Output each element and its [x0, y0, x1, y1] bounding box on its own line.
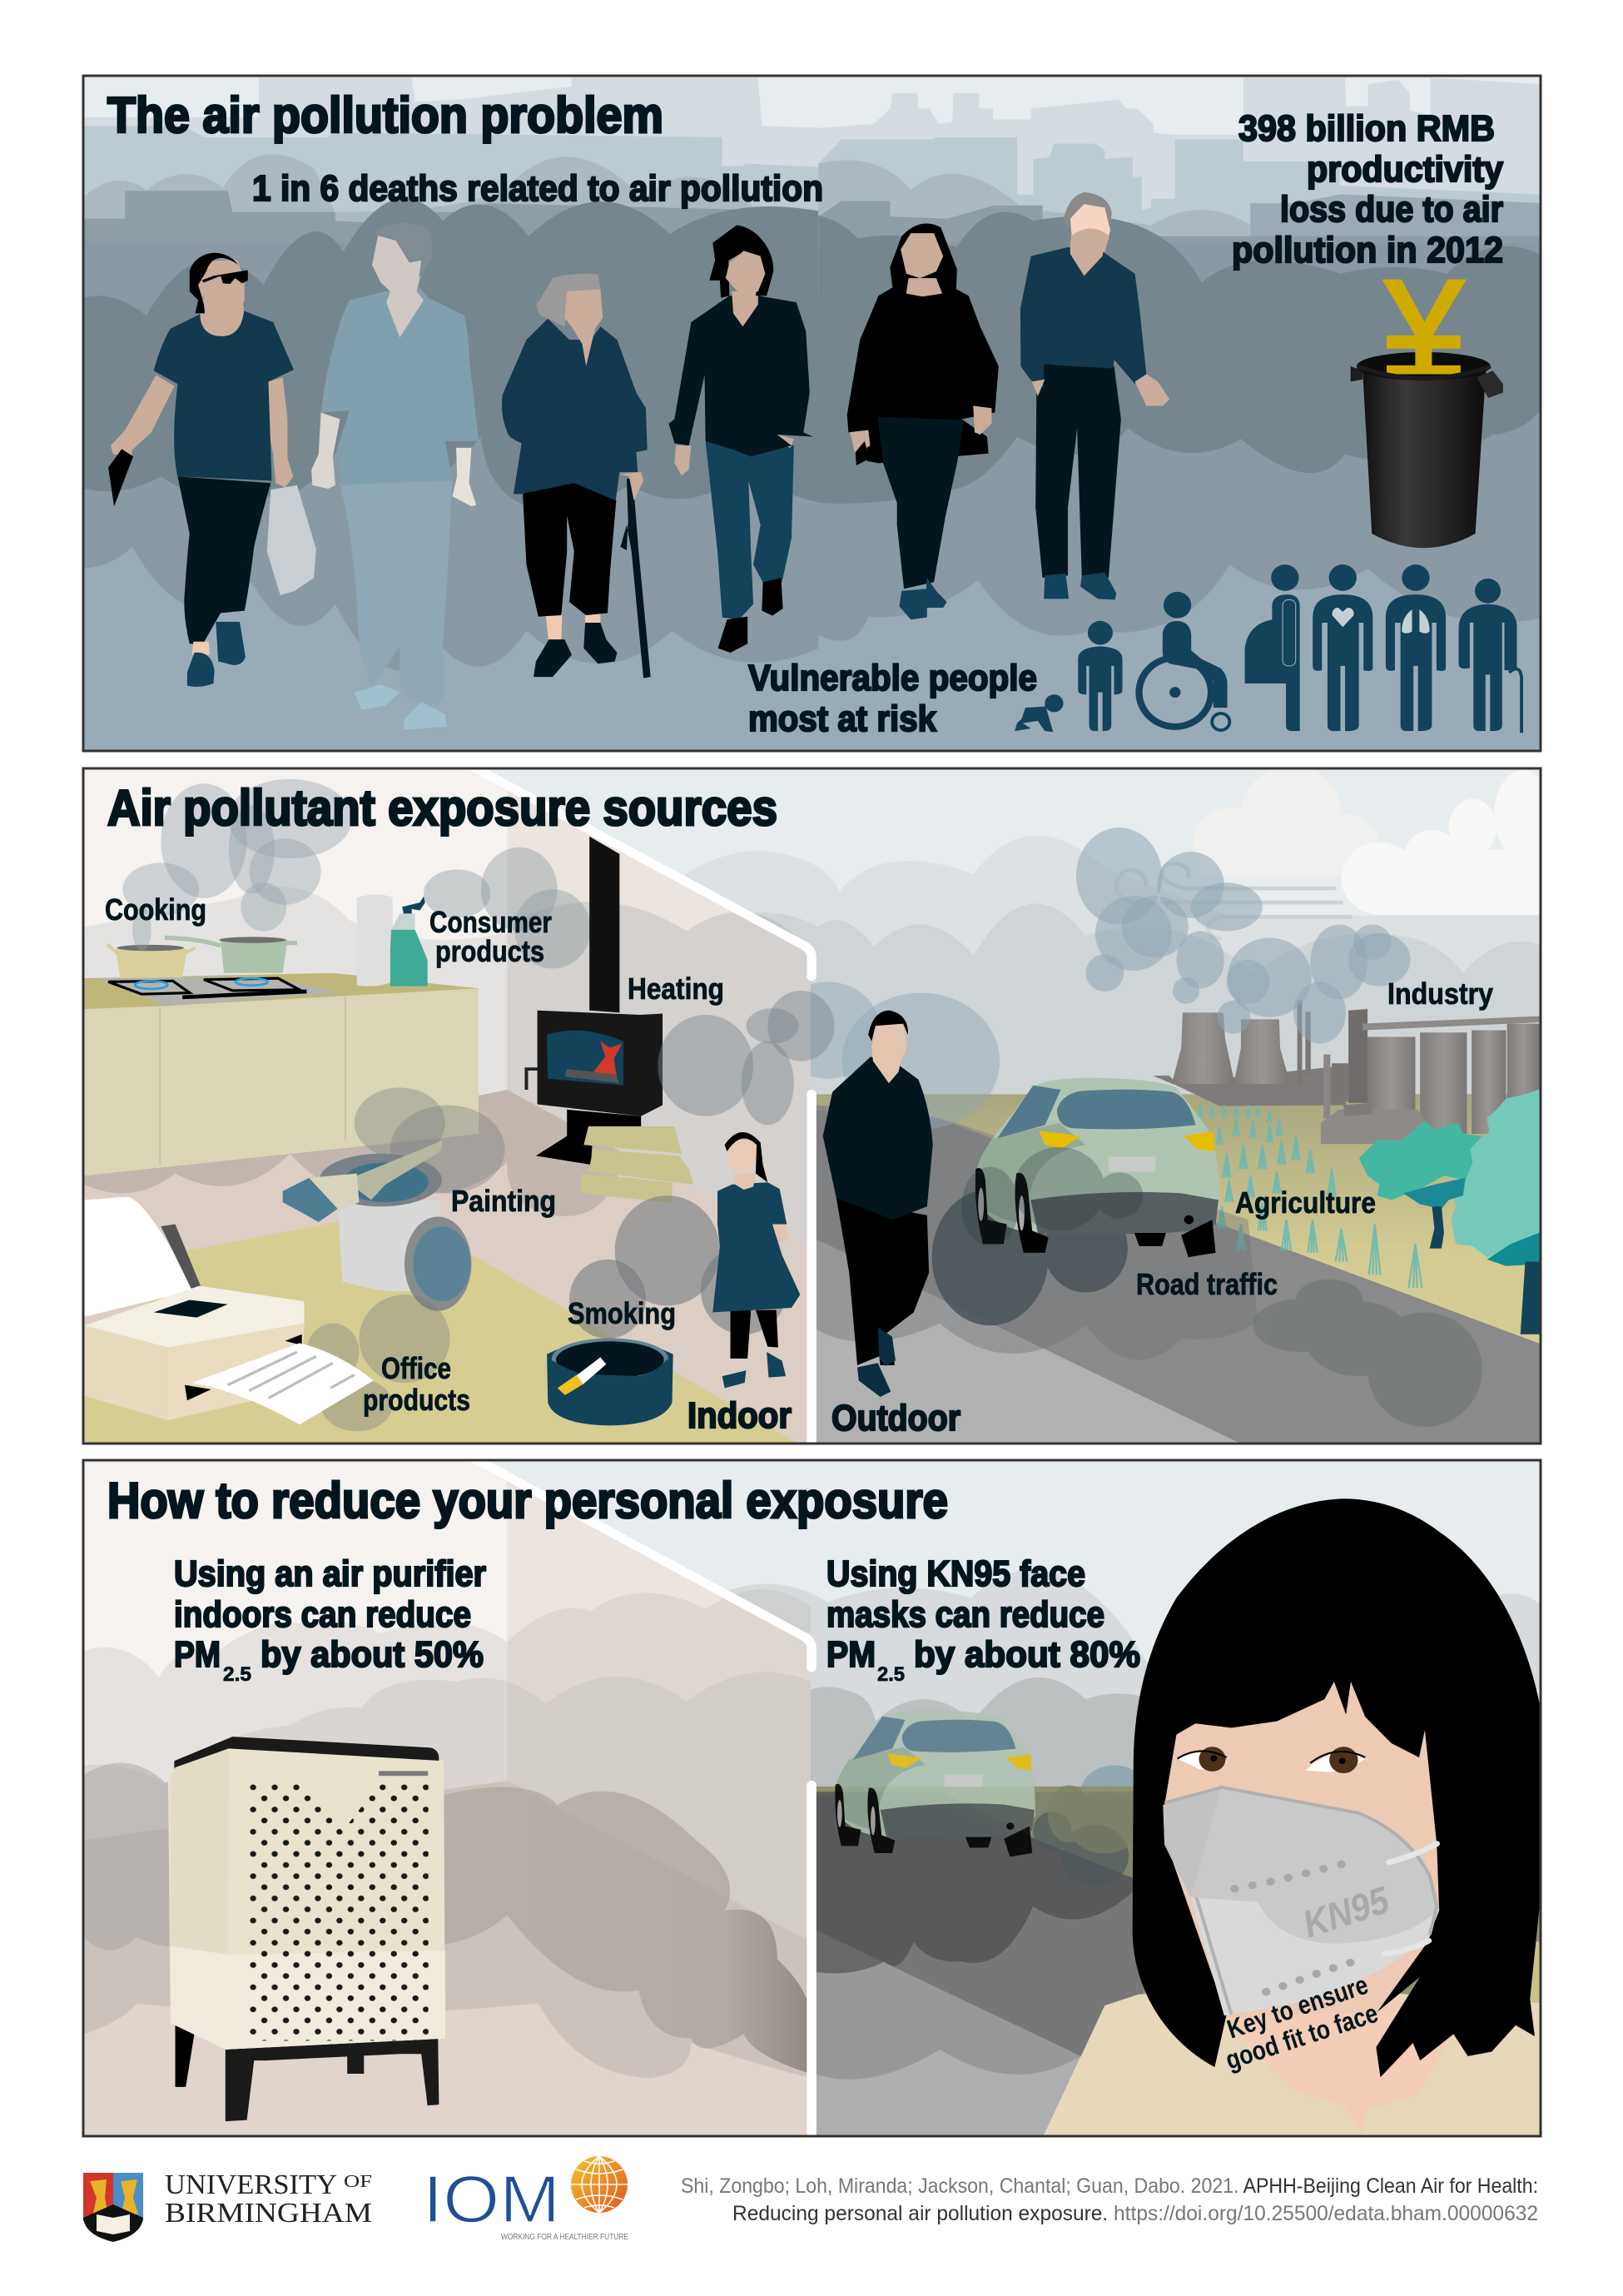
mask [1163, 1785, 1439, 2015]
person: girl [712, 1132, 800, 1388]
logo: IOM: WORKING FOR A HEALTHIER FUTURE [501, 2233, 628, 2242]
car [975, 1078, 1219, 1257]
icon: rubbish bin with yen symbol [1351, 280, 1503, 548]
logo: University of Birmingham [83, 2169, 372, 2242]
upper indoor smoke [84, 1589, 811, 2078]
smoke near products [424, 847, 591, 968]
person: neck [1219, 1985, 1453, 2134]
pavement [794, 1920, 1081, 2138]
people walking, right group [847, 192, 1521, 733]
right side sand [1530, 1941, 1544, 2030]
icon: person with lung condition [1386, 564, 1446, 731]
pale outdoor smoke [656, 1570, 1162, 1792]
cooking smoke [122, 779, 352, 951]
citation: Shi, Zongbo; Loh, Miranda; Jackson, Chantal; Guan, Dabo. 2021. APHH-Beijing Clean Air for Health: [681, 2174, 1538, 2198]
label: office products [363, 1351, 470, 1417]
darker outdoor smoke [754, 904, 1540, 1094]
statistic: productivity loss: productivity [1307, 149, 1503, 190]
text block: KN95 masks [826, 1553, 1140, 1686]
label: vulnerable people: Vulnerable people [748, 658, 1037, 698]
statistic: 1 in 6 deaths: 1 in 6 deaths related to air pollution [252, 168, 823, 209]
car in fog [835, 1710, 1035, 1856]
people walking, left group [108, 223, 813, 730]
icon: pregnant woman [1245, 564, 1300, 731]
dark lower smoke band [84, 1755, 811, 2074]
label: office products: products [363, 1383, 470, 1417]
label: heating: Heating [628, 972, 724, 1006]
icon: wheelchair user [1139, 592, 1229, 730]
paint tin and brush [283, 1141, 471, 1311]
blue haze [1081, 1766, 1148, 1818]
olive ground [794, 1787, 1544, 2007]
statistic: productivity loss: loss due to air [1280, 189, 1503, 230]
outdoor scene with mask wearer [656, 1498, 1559, 2138]
smoke on floor [84, 1090, 624, 1216]
text block: KN95 masks: masks can reduce [826, 1594, 1104, 1635]
printer [84, 1197, 374, 1424]
pavement [794, 1229, 1241, 1447]
citation [681, 2174, 1538, 2225]
label: agriculture: Agriculture [1235, 1185, 1376, 1220]
text block: air purifier: Using an air purifier [174, 1553, 486, 1594]
person: elderly woman with cane [502, 274, 651, 678]
icon: baby [1015, 694, 1064, 732]
factory [1153, 1001, 1540, 1144]
cooking pots [107, 937, 297, 978]
printer smoke [306, 1295, 450, 1431]
pale outdoor smoke [684, 836, 1540, 972]
floor smoke near smoking [569, 1195, 787, 1339]
label: office products: Office [381, 1351, 451, 1385]
logo: IOM: IOM [423, 2162, 560, 2236]
person: eyes [1178, 1747, 1365, 1773]
label: painting: Painting [451, 1184, 556, 1218]
logo: University of Birmingham: OF [344, 2171, 372, 2191]
text block: KN95 masks: 2.5 [877, 1663, 905, 1686]
middle indoor smoke [84, 1672, 811, 2078]
indoor scene [84, 766, 835, 1449]
air purifier [168, 1737, 445, 2121]
gas hob [99, 977, 340, 1006]
text block: air purifier [174, 1553, 486, 1686]
icon: person with heart condition [1313, 564, 1372, 731]
road [794, 1794, 1143, 2138]
label: cooking: Cooking [105, 892, 206, 927]
mask label: KN95: KN95 [1298, 1877, 1395, 1946]
label: consumer products: products [435, 934, 544, 968]
text block: KN95 masks: PM [826, 1634, 876, 1675]
logo: University of Birmingham: UNIVERSITY [165, 2169, 337, 2200]
person: man with blue shirt [1020, 192, 1169, 599]
dark smoke patch [1033, 1811, 1129, 1886]
text block: KN95 masks: by about 80% [914, 1634, 1140, 1675]
person: ghosted man in faded smoke [311, 223, 479, 730]
person: man outdoors [823, 1011, 933, 1397]
heater smoke [658, 991, 835, 1125]
text block: air purifier: by about 50% [261, 1634, 484, 1675]
darker outdoor smoke [656, 1677, 1162, 1792]
smoke behind man [775, 982, 1000, 1130]
ashtray with cigarette [547, 1339, 673, 1425]
city skyline and smoke background, right half [818, 77, 1544, 758]
label: smoking: Smoking [568, 1296, 676, 1330]
label: outdoor: Outdoor [831, 1398, 960, 1439]
city skyline and smoke background, left half [70, 77, 844, 758]
left wall haze [84, 887, 507, 1175]
outdoor scene [656, 766, 1551, 1447]
statistic: productivity loss: pollution in 2012 [1232, 230, 1503, 271]
mid grey smoke [794, 1792, 1143, 2080]
kitchen counter [84, 973, 479, 1175]
heading: the air pollution problem: The air pollution problem [107, 87, 663, 143]
text block: air purifier: PM [174, 1634, 221, 1675]
logo: IOM [423, 2156, 628, 2242]
heading: air pollutant exposure sources: Air pollutant exposure sources [107, 780, 777, 836]
roof and wall edge [471, 766, 812, 1449]
text block: air purifier: indoors can reduce [174, 1594, 471, 1635]
wood burner [526, 837, 663, 1165]
label: consumer products: Consumer [429, 905, 552, 939]
callout: key to ensure good fit: Key to ensure [1223, 1970, 1372, 2045]
panel: how to reduce your personal exposure [83, 1457, 1559, 2139]
text block: KN95 masks: Using KN95 face [826, 1553, 1085, 1594]
person: body [1043, 1985, 1544, 2138]
roof and wall edge [471, 1457, 812, 2139]
dark grey smoke [794, 1792, 1143, 1973]
road [794, 1103, 1544, 1447]
logo: University of Birmingham: BIRMINGHAM [165, 2198, 372, 2229]
dark smoke on road [932, 1189, 1128, 1325]
icon: elderly person with cane [1459, 579, 1521, 733]
label: vulnerable people [747, 663, 1037, 733]
heading: how to reduce your personal exposure: How to reduce your personal exposure [107, 1473, 948, 1528]
ground [794, 1094, 1544, 1447]
callout: key to ensure good fit: good fit to face [1222, 1998, 1382, 2075]
trees [1359, 1087, 1544, 1334]
haze on road [794, 1110, 1258, 1360]
panel: air pollutant exposure sources [83, 766, 1551, 1449]
label: road traffic: Road traffic [1136, 1267, 1278, 1301]
statistic: productivity loss: 398 billion RMB [1238, 108, 1495, 149]
person: woman with sunglasses and bags [108, 253, 316, 687]
white cloud right [1341, 770, 1551, 914]
right wall haze [507, 902, 811, 1250]
label: vulnerable people: most at risk [748, 698, 936, 739]
person: woman in black shirt and blue jeans [668, 226, 813, 653]
citation: Reducing personal air pollution exposure. https://doi.org/10.25500/edata.bham.00000632 [732, 2202, 1538, 2225]
icon: IOM globe [571, 2156, 628, 2213]
icon: wind lines [1116, 863, 1351, 938]
painting smoke [355, 1087, 505, 1193]
smoke over car [961, 1147, 1143, 1246]
person: face [1164, 1682, 1439, 2016]
olive smoke near horizon [1047, 1785, 1143, 1853]
label: consumer products [429, 905, 552, 968]
label: indoor: Indoor [687, 1395, 792, 1436]
grey cloud [1194, 766, 1378, 875]
panel: the air pollution problem [70, 76, 1544, 758]
logs [580, 1126, 693, 1203]
distant smoke right [1463, 1593, 1559, 1699]
icon: child [1078, 621, 1123, 731]
road exhaust smoke [1253, 1280, 1482, 1427]
person: woman in black sweater [847, 223, 999, 619]
text block: air purifier: 2.5 [223, 1663, 251, 1686]
consumer products [357, 895, 428, 986]
smoke plumes from factory [1076, 827, 1411, 1043]
rug [84, 1222, 797, 1444]
icon: university shield [83, 2173, 143, 2242]
label: industry: Industry [1387, 977, 1493, 1011]
crop rows [1199, 1106, 1422, 1288]
statistic: productivity loss [1232, 108, 1503, 271]
person: hair [1133, 1498, 1541, 2077]
indoor scene with air purifier [84, 1457, 812, 2139]
